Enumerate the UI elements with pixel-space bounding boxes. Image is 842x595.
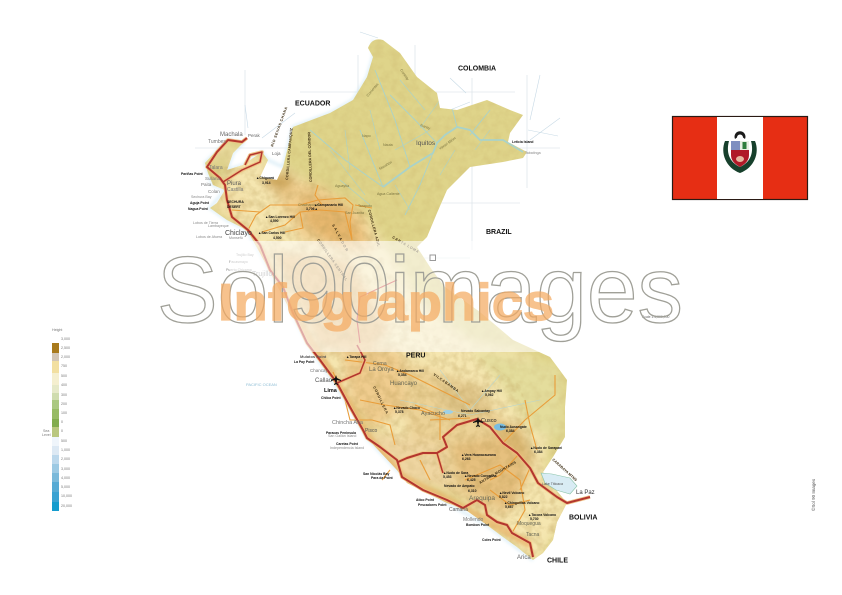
place labels: Para da Point	[371, 476, 394, 480]
small square marker	[430, 255, 436, 260]
place labels: Huancayo	[390, 381, 418, 387]
peak labels: ▲Ampay Hill	[481, 389, 502, 393]
peak labels: Nevado Salcantay	[461, 409, 490, 413]
peak labels: 6,310	[468, 489, 477, 493]
place labels	[181, 132, 595, 561]
place labels: Lobos de Afuera	[196, 235, 222, 239]
legend values: 2,500	[61, 346, 70, 350]
place labels: Camaná	[449, 507, 468, 513]
peak labels: ▲Tacora Volcano	[528, 513, 556, 517]
legend values: 100	[61, 411, 67, 415]
peak labels: ▲Nevil Volcano	[499, 491, 524, 495]
mountain and desert labels: Chachapoyas	[298, 203, 320, 207]
place labels: Coles Point	[482, 538, 502, 542]
peak labels: 6,384	[506, 429, 515, 433]
terrain texture: lowland	[212, 47, 563, 546]
place labels: Nagua Point	[188, 207, 209, 211]
place labels: Chilca Point	[321, 396, 341, 400]
place labels: Sechura Bay	[191, 195, 212, 199]
place labels: Aguja Point	[190, 201, 210, 205]
place labels: Iquitos	[416, 140, 436, 147]
legend values: 300	[61, 393, 67, 397]
legend values: 1,000	[61, 448, 70, 452]
place labels: San Gallán Island	[328, 434, 356, 438]
mountain and desert labels: CORDILLERA	[372, 386, 389, 415]
country labels: BRAZIL	[486, 229, 512, 236]
airport markers	[331, 375, 483, 427]
mountain and desert labels: Corrientes	[366, 82, 380, 98]
Lake Titicaca	[541, 473, 577, 494]
place labels: Puerto Chicama	[226, 268, 252, 272]
coastal band	[258, 248, 530, 545]
mountain and desert labels: Agua Caliente	[377, 192, 400, 196]
flag of Peru	[672, 116, 808, 200]
watermark: Infographics: Infographics	[218, 274, 554, 332]
place labels: Colan	[208, 189, 220, 194]
peak labels: ▲Andamarca Hill	[396, 369, 424, 373]
peak labels: ▲Chinguillas Volcano	[504, 501, 540, 505]
place labels: Atico Point	[416, 498, 435, 502]
legend values: 400	[61, 383, 67, 387]
legend values: 3,000	[61, 337, 70, 341]
peak labels: 6,384	[534, 450, 543, 454]
mountain and desert labels: Marañón	[378, 160, 393, 171]
peak labels: ▲Nudo de Sarapani	[530, 446, 562, 450]
scale text: Scale 1:5,000,000	[642, 315, 669, 319]
rivers	[310, 70, 540, 415]
place labels: Cusco	[481, 418, 497, 424]
place labels: Lambayeque	[208, 224, 229, 228]
mountain and desert labels: CANTA LOMA	[392, 235, 420, 254]
legend values: 200	[61, 402, 67, 406]
peak labels: Nudo Ausangate	[500, 425, 527, 429]
place labels: Paita	[201, 182, 212, 187]
peak labels: 5,730	[530, 517, 539, 521]
country labels: COLOMBIA	[458, 66, 496, 72]
place labels: La Paz	[576, 490, 595, 496]
mountain and desert labels: SALVADOR	[331, 224, 349, 252]
mountain and desert labels: DESERT	[227, 205, 242, 209]
copyright credit: ©Sol 90 Images	[810, 478, 816, 511]
place labels: Tumbes	[208, 139, 226, 145]
peak labels: 5,062	[485, 393, 494, 397]
legend values: 500	[61, 374, 67, 378]
mountain and desert labels: SECHURA	[227, 200, 244, 204]
place labels: Ayacucho	[421, 411, 445, 417]
peak labels: ▲Chiguará	[256, 176, 274, 180]
peak labels: 4,500	[273, 236, 282, 240]
place labels: Trujillo	[252, 271, 272, 278]
peak labels: ▲Nudo de Sara	[443, 471, 468, 475]
place labels: Arica	[517, 555, 531, 561]
country labels: ECUADOR	[295, 100, 330, 108]
mountain and desert labels: CORDILLERA CAMPANQUIZ	[285, 127, 294, 180]
place labels: Chincha Alta	[332, 420, 364, 426]
mountain and desert labels: Yavari Mirim	[438, 136, 457, 151]
icon: coat of arms	[723, 131, 757, 173]
legend values: 20,000	[61, 504, 72, 508]
mountain and desert labels: Nanay	[420, 123, 431, 131]
mountain and desert labels: Curaray	[399, 68, 410, 81]
peak labels: 6,271	[458, 414, 467, 418]
mountain and desert labels: VILCABAMBA	[432, 373, 460, 393]
legend values	[42, 337, 72, 508]
mountain and desert labels: CORDILLERA AZUL	[367, 209, 381, 248]
country labels: PERU	[406, 352, 425, 360]
legend values: 4,000	[61, 476, 70, 480]
legend colour bar	[52, 343, 59, 511]
place labels: Lima	[324, 388, 338, 394]
place labels: PACIFIC OCEAN	[246, 382, 277, 387]
mountain and desert labels	[227, 68, 578, 485]
place labels: Sullana	[205, 176, 221, 181]
place labels: Machala	[220, 132, 243, 138]
place labels: Perak	[248, 133, 261, 138]
peak labels: 5,822	[499, 495, 508, 499]
watermark panel	[230, 241, 690, 352]
main road line	[207, 138, 590, 557]
place labels: Talara	[209, 165, 223, 171]
terrain texture: andes	[220, 167, 562, 556]
place labels: Leticia Island	[512, 140, 533, 144]
peak labels: ▲Nevado Chaco	[393, 406, 420, 410]
place labels: Chancay	[310, 368, 329, 373]
place labels: Castilla	[227, 187, 244, 193]
peak labels: 4,590	[270, 219, 279, 223]
place labels: Moquegua	[517, 521, 541, 527]
country labels: BOLIVIA	[569, 514, 597, 522]
mountain and desert labels: ANTAGO MOUNTAINS	[478, 460, 517, 485]
place labels: Arequipa	[469, 495, 495, 502]
peak labels: ▲San Carlos Hill	[258, 231, 285, 235]
peak labels: ▲Vera Huanacaurana	[461, 453, 496, 457]
place labels: Tabatinga	[525, 151, 541, 155]
peak labels: 3,706▲	[306, 207, 318, 211]
legend values: 5,000	[61, 485, 70, 489]
mountain and desert labels: Aguaytía	[335, 184, 349, 188]
mountain and desert labels: San Juanita	[345, 211, 364, 215]
legend: height scale	[42, 328, 72, 511]
place labels: Bombon Point	[466, 523, 490, 527]
main roads	[207, 138, 590, 557]
peak labels: 5,453	[443, 475, 452, 479]
peak labels: 5,354	[398, 373, 407, 377]
mountain and desert labels: Tarapoto	[358, 204, 372, 208]
place labels: Trujillo Bay	[236, 253, 254, 257]
secondary roads	[232, 185, 555, 533]
peak labels: 5,378	[395, 410, 404, 414]
map: Peru relief	[205, 39, 567, 560]
place labels: Piura	[227, 181, 242, 187]
peak labels: ▲Tarapa Hill	[346, 355, 366, 359]
watermark: Sol90images outline: Sol90images	[157, 237, 683, 342]
place labels: Mulatos Point	[300, 354, 327, 359]
place labels: Lake Titicaca	[542, 482, 563, 486]
place labels: Loja	[272, 151, 281, 156]
mountain and desert labels: Nauta	[383, 143, 393, 147]
country labels: CHILE	[547, 558, 568, 564]
mountain and desert labels: Napo	[362, 134, 371, 138]
peak labels	[256, 176, 562, 521]
legend values: 0	[61, 420, 63, 424]
place labels: Pacasmayo	[229, 260, 248, 264]
place labels: Paracas Peninsula	[326, 431, 356, 435]
peak labels: 3,914	[262, 181, 271, 185]
legend values: Sea	[43, 429, 49, 433]
legend values: 3,000	[61, 467, 70, 471]
mountain and desert labels: CORDILLERA DEL CÓNDOR	[306, 132, 313, 182]
place labels: Cerna	[373, 361, 387, 367]
place labels: Monsefú	[229, 236, 243, 240]
place labels: San Nicolás Bay	[363, 472, 389, 476]
peak labels: 5,667	[505, 505, 514, 509]
mountain and desert labels: CORDILLERA CENTRAL	[316, 238, 349, 282]
peak labels: ▲Campanario Hill	[314, 203, 343, 207]
place labels: Callao	[315, 378, 333, 384]
lakes	[443, 410, 506, 430]
place labels: Pescadores Point	[418, 503, 447, 507]
graticule and neighbouring rivers	[195, 32, 560, 258]
mountain and desert labels: RÍO SEIVAS CHANA	[269, 106, 288, 147]
coastal water glow	[205, 40, 533, 560]
place labels: Independencia Island	[330, 446, 364, 450]
legend values: 750	[61, 364, 67, 368]
legend values: 2,000	[61, 355, 70, 359]
place labels: Mollendo	[463, 517, 484, 523]
peak labels: ▲Nevado Coropuna	[464, 474, 497, 478]
legend values: 10,000	[61, 494, 72, 498]
peak labels: ▲San Lorenzo Hill	[265, 215, 295, 219]
lowland jungle base	[205, 39, 567, 560]
peak labels: 6,425	[467, 478, 476, 482]
andes relief blobs	[200, 135, 570, 565]
legend: height scale: Height	[52, 328, 62, 332]
place labels: Chiclayo	[225, 230, 252, 237]
mountain and desert labels: CARABAYA MTNS	[551, 458, 578, 483]
legend values: 500	[61, 439, 67, 443]
legend values: 0	[61, 429, 63, 433]
place labels: Tacna	[526, 532, 540, 538]
peak labels: Nevado de Ampato	[444, 484, 475, 488]
peak labels: 6,263	[462, 457, 471, 461]
place labels: Pisco	[365, 428, 377, 434]
legend values: 2,000	[61, 457, 70, 461]
place labels: Lobos de Tierra	[193, 221, 218, 225]
place labels: Caretas Point	[336, 442, 359, 446]
place labels: La Pay Point	[294, 360, 315, 364]
country labels	[295, 66, 597, 564]
place labels: Pariñas Point	[181, 172, 204, 176]
legend values: Level	[42, 433, 51, 437]
place labels: La Oroya	[369, 367, 394, 373]
